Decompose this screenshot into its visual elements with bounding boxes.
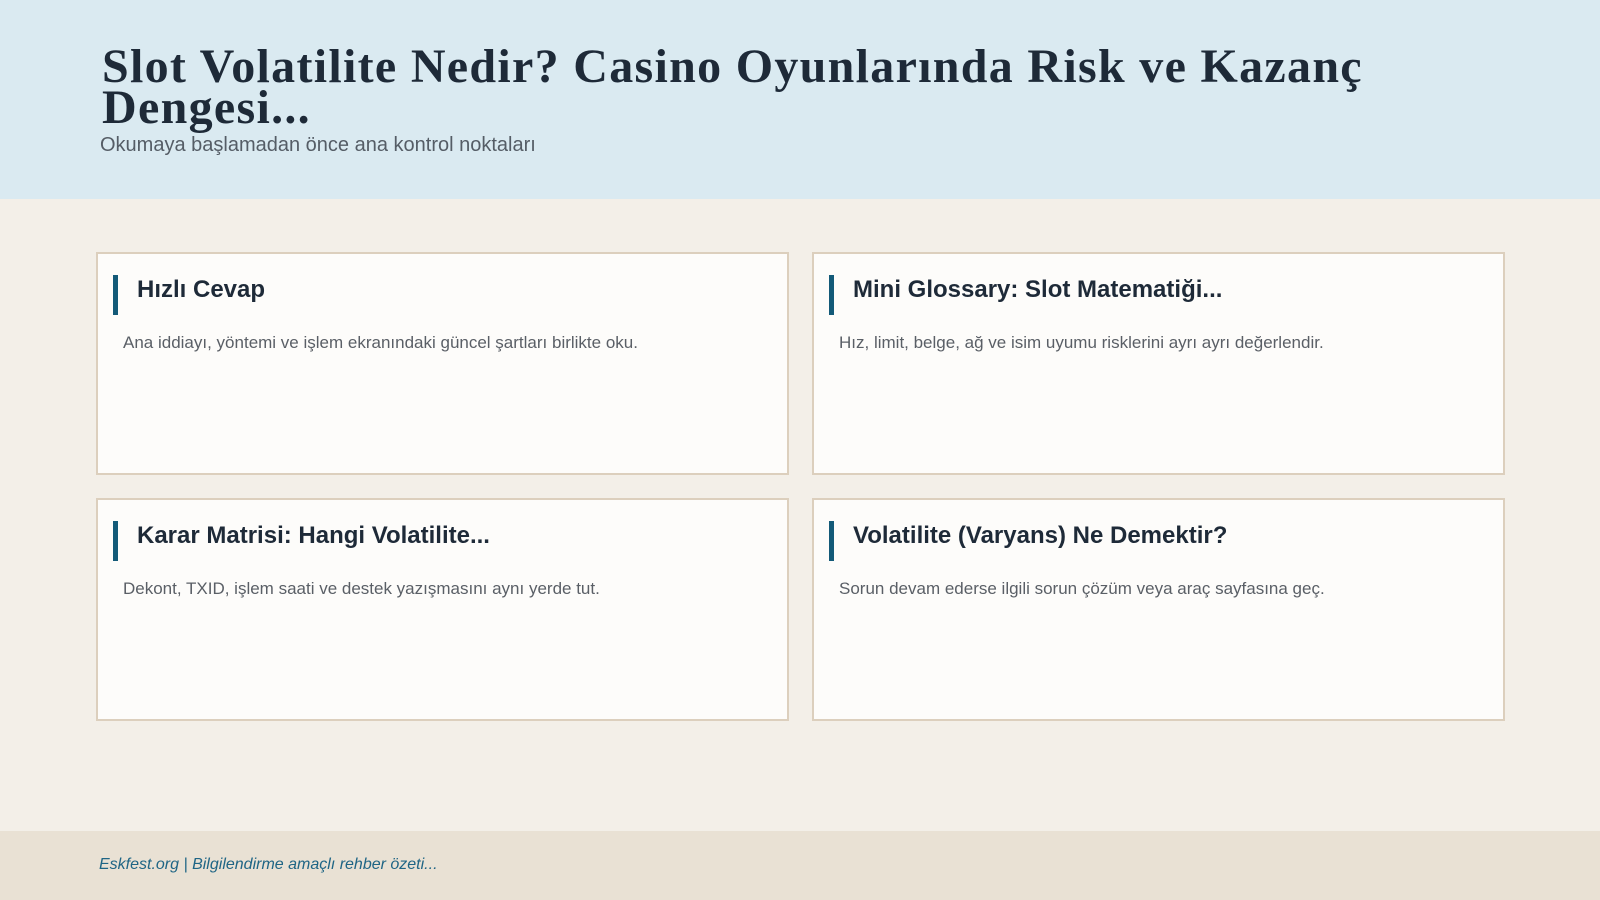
text: Hız, limit, belge, ağ ve isim uyumu risklerini ayrı ayrı değerlendir.: [839, 333, 1324, 352]
panel: Volatilite: [812, 498, 1505, 721]
heading: Mini Glossary: Slot Matematiği...: [853, 276, 1222, 303]
panel: Hızlı Cevap: [96, 252, 789, 475]
heading: Karar Matrisi: Hangi Volatilite...: [137, 522, 490, 549]
text: Sorun devam ederse ilgili sorun çözüm veya araç sayfasına geç.: [839, 579, 1325, 598]
accent bar: [829, 275, 834, 315]
title: Dengesi...: [102, 81, 311, 134]
title: [102, 40, 1363, 134]
text: Dekont, TXID, işlem saati ve destek yazışmasını aynı yerde tut.: [123, 579, 600, 598]
accent bar: [113, 521, 118, 561]
text: Ana iddiayı, yöntemi ve işlem ekranındaki güncel şartları birlikte oku.: [123, 333, 638, 352]
panel: Mini Glossary: [812, 252, 1505, 475]
panel: Karar Matrisi: [96, 498, 789, 721]
header: [0, 0, 1600, 199]
accent bar: [113, 275, 118, 315]
footer: [0, 831, 1600, 900]
heading: Volatilite (Varyans) Ne Demektir?: [853, 522, 1227, 549]
subtitle: Okumaya başlamadan önce ana kontrol noktaları: [100, 134, 536, 156]
title: Slot Volatilite Nedir? Casino Oyunlarında Risk ve Kazanç: [102, 40, 1363, 93]
footer text: Eskfest.org | Bilgilendirme amaçlı rehber özeti...: [99, 856, 438, 873]
heading: Hızlı Cevap: [137, 276, 265, 303]
accent bar: [829, 521, 834, 561]
